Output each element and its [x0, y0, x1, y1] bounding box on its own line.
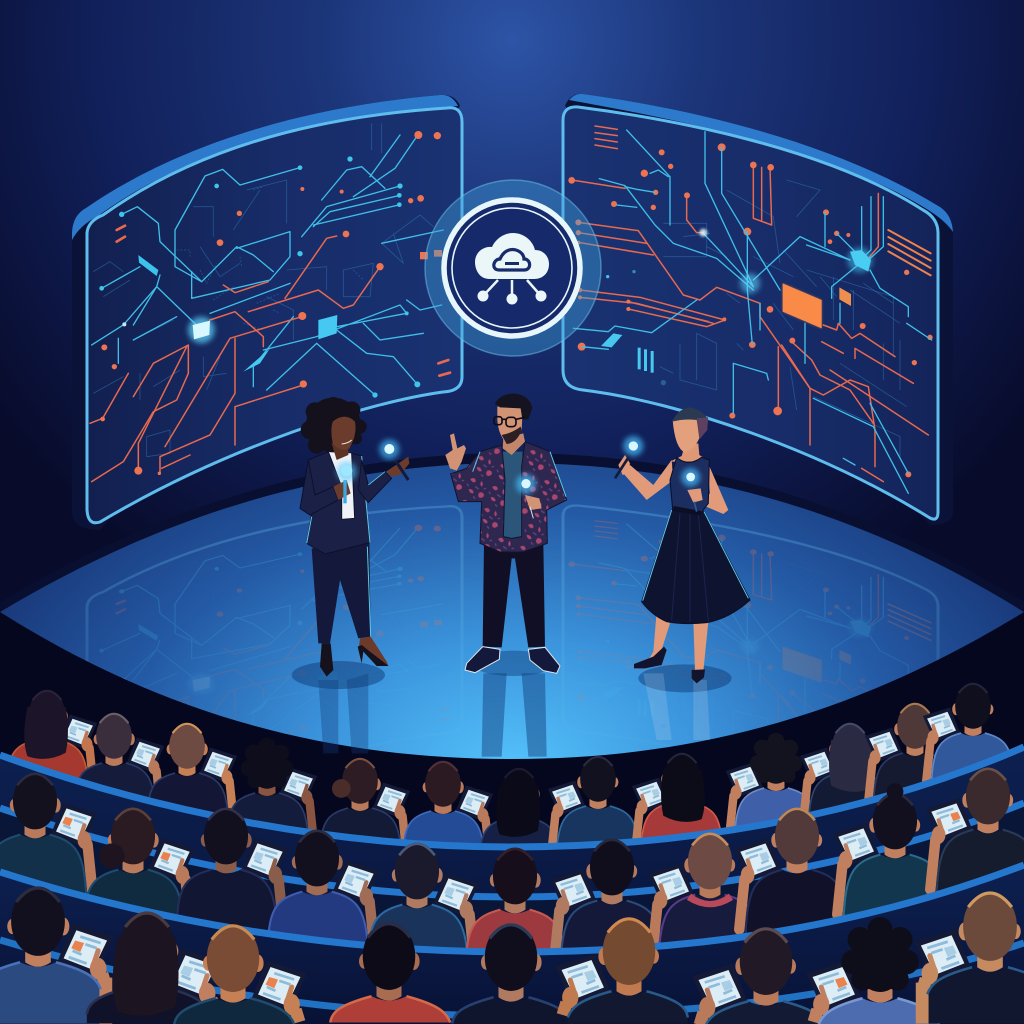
hand and mic at chest — [687, 488, 703, 503]
head — [673, 417, 701, 453]
inner shirt — [503, 452, 523, 537]
seat row 4 rail — [0, 940, 1024, 1016]
patterned jacket — [451, 442, 567, 552]
seat row 3 backs and rail — [0, 865, 1024, 1024]
neck, arms and shoulders — [623, 460, 673, 500]
legs — [647, 612, 708, 672]
glasses — [494, 417, 525, 427]
skirt — [642, 510, 750, 624]
curly hair — [301, 397, 367, 454]
presenters' floor shadows and reflections — [292, 651, 732, 757]
panel: reflective stage floor — [0, 464, 1024, 759]
icon: cloud network emblem — [425, 180, 601, 356]
stage rim — [0, 458, 1024, 608]
blazer — [307, 452, 370, 554]
hair — [495, 393, 532, 419]
presenter: left woman in blazer — [300, 397, 409, 677]
bodice — [670, 457, 709, 513]
hands and microphones — [333, 480, 351, 500]
audience: front row — [0, 887, 1024, 1024]
head — [503, 433, 525, 455]
face — [331, 417, 356, 450]
auditorium dark floor — [0, 612, 1024, 1024]
left arm — [300, 460, 338, 515]
lower hand and microphone — [525, 495, 542, 510]
seat row 1 backs and rail — [0, 747, 1024, 1024]
white shirt — [328, 452, 355, 519]
hair — [672, 407, 708, 438]
legs and trousers — [312, 543, 371, 643]
screen reflections on floor — [86, 504, 940, 734]
trousers — [483, 543, 545, 647]
presenter: right woman in black dress — [615, 407, 750, 683]
hand and mic raised — [618, 455, 630, 475]
seat row 2 rail behind second row — [0, 803, 1024, 1024]
audience: back row — [7, 683, 1013, 871]
presenter: centre man in patterned shirt — [445, 393, 567, 673]
panel: right curved circuit screen — [563, 94, 953, 525]
panel: left curved circuit screen — [72, 95, 462, 530]
heels — [634, 647, 705, 683]
pointing hand — [445, 433, 466, 471]
sneakers — [465, 647, 560, 673]
shoes — [320, 637, 389, 677]
right arm — [358, 460, 392, 503]
audience: second row — [0, 768, 1024, 975]
neck — [332, 443, 348, 460]
